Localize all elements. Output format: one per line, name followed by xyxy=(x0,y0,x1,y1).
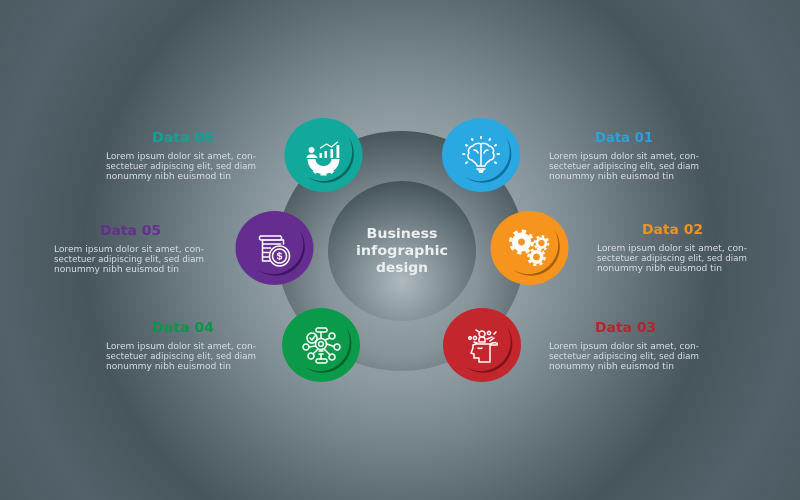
node: red, Data 03 xyxy=(443,308,521,382)
text block: Data 03: Data 03 xyxy=(595,320,656,336)
text block: Data 03: nonummy nibh euismod tin xyxy=(549,361,674,371)
text block: Data 03 xyxy=(549,320,699,371)
text block: Data 01 xyxy=(549,130,699,181)
text block: Data 05: Lorem ipsum dolor sit amet, con- xyxy=(54,244,204,254)
text block: Data 03: sectetuer adipiscing elit, sed diam xyxy=(549,351,699,361)
icon: three gears xyxy=(510,231,548,265)
text block: Data 05: Data 05 xyxy=(100,223,161,239)
text block: Data 05: sectetuer adipiscing elit, sed diam xyxy=(54,254,204,264)
node: teal, Data 06 xyxy=(284,118,362,192)
text block: Data 01: nonummy nibh euismod tin xyxy=(549,171,674,181)
hub title: Business xyxy=(366,226,438,242)
node: green, Data 04 xyxy=(282,308,360,382)
text block: Data 05: nonummy nibh euismod tin xyxy=(54,264,179,274)
outer ring xyxy=(277,131,525,371)
text block: Data 01: Lorem ipsum dolor sit amet, con- xyxy=(549,151,699,161)
icon: idea network xyxy=(303,328,340,363)
text block: Data 04: Lorem ipsum dolor sit amet, con- xyxy=(106,341,256,351)
text block: Data 01: Data 01 xyxy=(595,130,653,146)
hub title: design xyxy=(376,260,428,276)
text block: Data 06 xyxy=(106,130,256,181)
text block: Data 06: nonummy nibh euismod tin xyxy=(106,171,231,181)
central hub xyxy=(277,131,525,371)
text block: Data 02: Data 02 xyxy=(642,222,703,238)
text block: Data 06: Lorem ipsum dolor sit amet, con- xyxy=(106,151,256,161)
inner circle xyxy=(328,181,476,321)
icon: presenter and gear chart xyxy=(306,142,340,176)
text block: Data 02: nonummy nibh euismod tin xyxy=(597,263,722,273)
text block: Data 02: Lorem ipsum dolor sit amet, con- xyxy=(597,243,747,253)
text block: Data 02: sectetuer adipiscing elit, sed diam xyxy=(597,253,747,263)
node: blue, Data 01 xyxy=(442,118,520,192)
text block: Data 04: Data 04 xyxy=(152,320,214,336)
icon: brain light bulb xyxy=(463,137,499,173)
node: purple, Data 05 xyxy=(236,211,314,285)
hub title: infographic xyxy=(356,243,448,259)
text block: Data 01: sectetuer adipiscing elit, sed diam xyxy=(549,161,699,171)
icon: coin stack with dollar: $ xyxy=(277,252,283,262)
hub title xyxy=(356,226,448,276)
text block: Data 03: Lorem ipsum dolor sit amet, con- xyxy=(549,341,699,351)
node: orange, Data 02 xyxy=(490,211,568,285)
text block: Data 06: sectetuer adipiscing elit, sed diam xyxy=(106,161,256,171)
text block: Data 06: Data 06 xyxy=(152,130,214,146)
text block: Data 04: sectetuer adipiscing elit, sed diam xyxy=(106,351,256,361)
text block: Data 02 xyxy=(597,222,747,273)
text block: Data 05 xyxy=(54,223,204,274)
icon: head with ideas xyxy=(469,330,497,362)
text block: Data 04: nonummy nibh euismod tin xyxy=(106,361,231,371)
text block: Data 04 xyxy=(106,320,256,371)
